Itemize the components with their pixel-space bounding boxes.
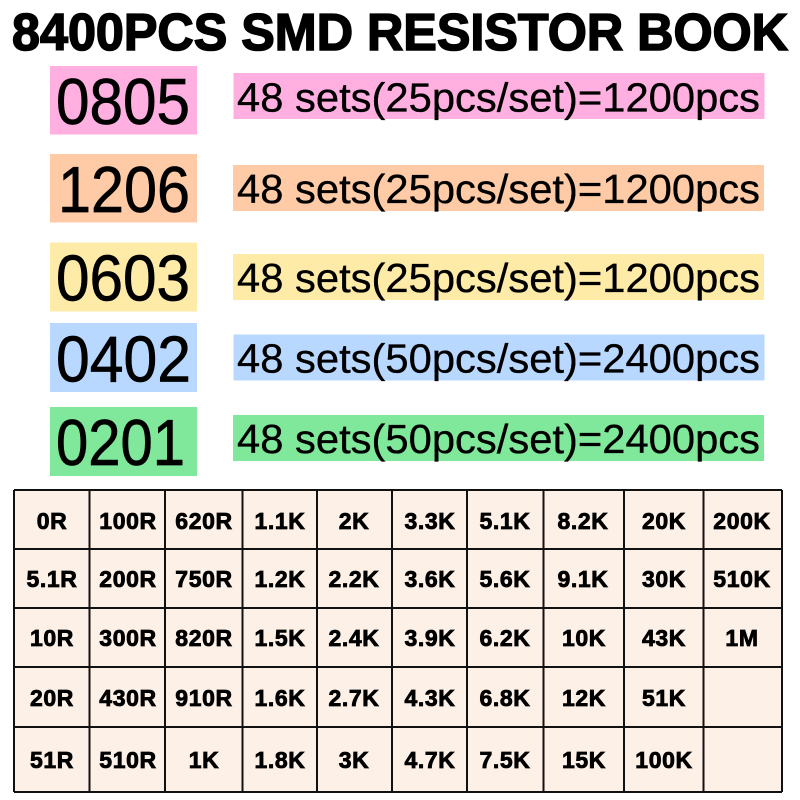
row: 0805 quantity: 48 sets(25pcs/set)=1200pcs [237, 74, 760, 120]
row: 0603 size label: 0603 [56, 242, 190, 314]
row: 0402 quantity: 48 sets(50pcs/set)=2400pcs [237, 336, 760, 382]
resistance value table: 3.9K [405, 625, 455, 651]
row: 1206 quantity: 48 sets(25pcs/set)=1200pcs [237, 166, 760, 212]
resistance value table: 1K [189, 747, 219, 773]
resistance value table: 820R [175, 625, 233, 651]
resistance value table: 1.2K [255, 566, 305, 592]
resistance value table: 750R [175, 566, 233, 592]
resistance value table: 9.1K [558, 566, 608, 592]
resistance value table: 1.5K [255, 625, 305, 651]
resistance value table: 510R [99, 747, 157, 773]
row: 0603 quantity: 48 sets(25pcs/set)=1200pcs [237, 255, 760, 301]
resistance value table: 2K [339, 508, 369, 534]
resistance value table: 5.1K [480, 508, 530, 534]
resistance value table: 4.3K [405, 685, 455, 711]
resistance value table: 100K [635, 747, 693, 773]
row: 0805 size label: 0805 [56, 65, 190, 138]
resistance value table: 15K [562, 747, 606, 773]
row: 0201 size label: 0201 [56, 406, 185, 479]
resistance value table: 3.3K [405, 508, 455, 534]
resistance value table: 7.5K [480, 747, 530, 773]
resistance value table: 1.6K [255, 685, 305, 711]
resistance value table: 10K [562, 625, 606, 651]
resistance value table: 1.1K [255, 508, 305, 534]
resistance value table: 30K [642, 566, 686, 592]
resistance value table: 20R [30, 685, 74, 711]
resistance value table: 3K [339, 747, 369, 773]
resistance value table: 0R [37, 508, 67, 534]
title: 8400PCS SMD RESISTOR BOOK [12, 4, 788, 62]
resistance value table: 200K [713, 508, 771, 534]
row: 1206 size label: 1206 [58, 153, 190, 226]
resistance value table: 6.2K [480, 625, 530, 651]
resistance value table: 2.4K [329, 625, 379, 651]
resistance value table: 620R [175, 508, 233, 534]
resistance value table: 910R [175, 685, 233, 711]
resistance value table: 5.1R [27, 566, 77, 592]
resistance value table: 51K [642, 685, 686, 711]
resistance value table: 51R [30, 747, 74, 773]
resistance value table [14, 490, 782, 792]
resistance value table: 200R [99, 566, 157, 592]
resistance value table: 6.8K [480, 685, 530, 711]
resistance value table: 5.6K [480, 566, 530, 592]
resistance value table: 8.2K [558, 508, 608, 534]
row: 0201 quantity: 48 sets(50pcs/set)=2400pcs [237, 416, 760, 462]
resistance value table: 10R [30, 625, 74, 651]
resistance value table: 43K [642, 625, 686, 651]
resistance value table: 12K [562, 685, 606, 711]
row: 0402 size label: 0402 [56, 322, 191, 396]
resistance value table: 20K [642, 508, 686, 534]
resistance value table: 2.7K [329, 685, 379, 711]
resistance value table: 4.7K [405, 747, 455, 773]
resistance value table: 430R [99, 685, 157, 711]
resistance value table: 1M [725, 625, 759, 651]
resistance value table: 1.8K [255, 747, 305, 773]
resistance value table: 3.6K [405, 566, 455, 592]
resistance value table: 300R [99, 625, 157, 651]
resistance value table: 2.2K [329, 566, 379, 592]
resistance value table: 100R [99, 508, 157, 534]
resistance value table: 510K [713, 566, 771, 592]
